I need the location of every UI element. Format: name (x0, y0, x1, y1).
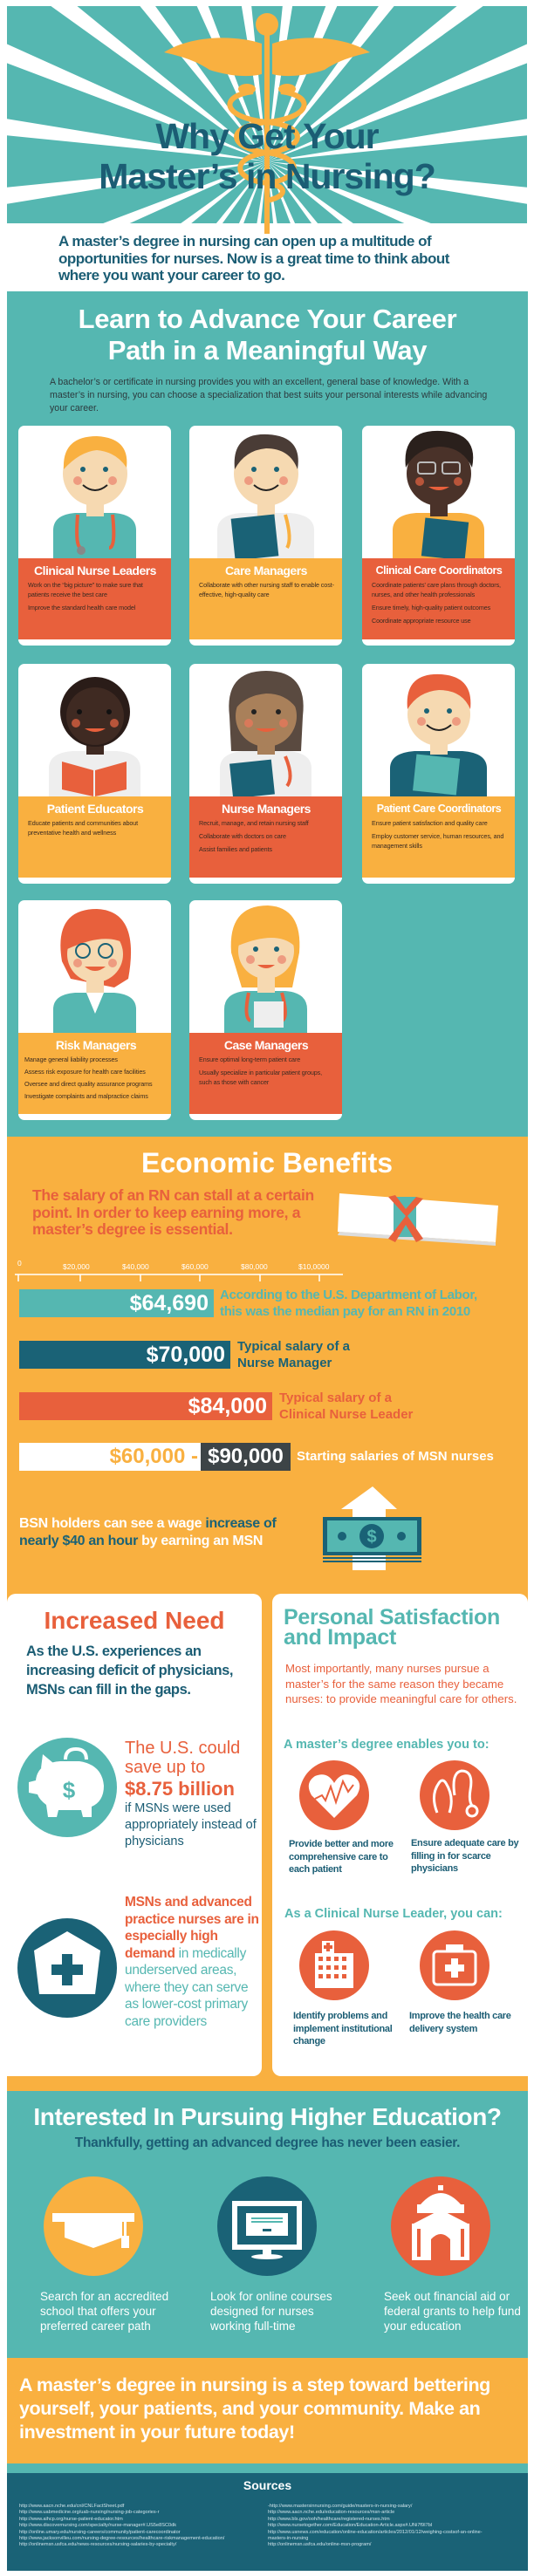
label: nurse manager: Typical salary of a (237, 1339, 350, 1354)
card text: Recruit, manage, and retain nursing staff (199, 819, 309, 827)
text: sources right: http://www.nursetogether.com/Education/Education-Article.aspx#.UNi7f9I7bI (268, 2523, 432, 2528)
caption: accredited school: Search for an accredited school that offers your preferred career path (40, 2290, 168, 2333)
card text: Coordinate patients’ care plans through doctors, nurses, and other health professionals (372, 581, 501, 598)
intro text: A master’s degree in nursing can open up a multitude of opportunities for nurses. Now is a great time to think about where you want your career to go. (58, 233, 449, 284)
label: RN median (220, 1288, 477, 1319)
text: sources left: http://www.jacksonvilleu.com/nursing-degree-resources/healthcare-riskmanagement-education/ (19, 2536, 224, 2541)
text: sources right: masters-in-nursing (268, 2536, 308, 2541)
label: clinical nurse leader: Clinical Nurse Leader (279, 1407, 413, 1422)
icon: heart (299, 1760, 369, 1830)
text: sources left: http://www.uabmedicine.org/uab-nursing/nursing-job-categories-r (19, 2510, 159, 2515)
card: nurse managers (189, 664, 342, 884)
chart: salary axis: 0 (17, 1259, 22, 1268)
text: sources left: http://onlinemsn.usfca.edu/news-resources/nursing-salaries-by-specialty/ (19, 2542, 176, 2547)
chart: salary axis: $40,000 (122, 1262, 149, 1271)
card text (362, 558, 515, 639)
icon: hospital building (299, 1930, 369, 2000)
callout: closing statement (7, 2358, 528, 2463)
icon: computer (217, 2176, 317, 2276)
card text: Usually specialize in particular patient groups, such as those with cancer (199, 1069, 322, 1086)
card: patient educators (18, 664, 171, 884)
chart: salary axis: $80,000 (241, 1262, 268, 1271)
card text: Investigate complaints and malpractice claims (24, 1092, 148, 1100)
card text: Oversee and direct quality assurance programs (24, 1080, 153, 1088)
chart: salary axis: $10,0000 (298, 1262, 330, 1271)
chart: salary axis: $20,000 (63, 1262, 90, 1271)
label: nurse manager (237, 1339, 351, 1370)
label: RN median: According to the U.S. Department of Labor, (220, 1288, 477, 1302)
heading: sources: Sources (243, 2478, 291, 2492)
heading: personal satisfaction: Personal Satisfaction and Impact (284, 1605, 500, 1650)
card text: Assess risk exposure for health care facilities (24, 1068, 146, 1076)
card: case managers (189, 900, 342, 1120)
text: deficit: As the U.S. experiences an increasing deficit of physicians, MSNs can fill in the gaps. (26, 1643, 233, 1698)
card text: Work on the “big picture” to make sure that patients receive the best care (28, 581, 143, 598)
card text: Ensure patient satisfaction and quality care (372, 819, 488, 827)
heading: learn to advance (79, 304, 457, 366)
bar: nurse manager: $70,000 (147, 1343, 225, 1367)
icon: hospital (17, 1918, 117, 2018)
bar: RN median (19, 1289, 214, 1317)
text: high demand: MSNs and advanced practice nurses are in especially high demand in medically underserved areas, where they can serve as lower-cost primary care providers (125, 1895, 259, 2029)
subheading: enables you to: A master’s degree enables you to: (284, 1738, 490, 1752)
card text: Care Managers (225, 564, 307, 577)
card text (189, 1033, 342, 1114)
icon: stethoscope (420, 1760, 490, 1830)
card text: Coordinate appropriate resource use (372, 617, 471, 625)
card text: Risk Managers (56, 1038, 136, 1052)
icon: university building (391, 2176, 490, 2276)
header sunburst (7, 6, 527, 223)
caption: improve delivery: Improve the health care delivery system (409, 2011, 511, 2034)
card text: Patient Care Coordinators (377, 803, 501, 815)
panel: increased need (7, 1594, 262, 2076)
intro paragraph: A bachelor’s or certificate in nursing provides you with an excellent, general base of knowledge. With a master’s in nursing, you can choose a specialization that best suits your personal interests while advancing your career. (50, 377, 487, 413)
text: sources right: http://www.usnews.com/education/online-education/articles/2012/01/12/weighing-costsof-an-online- (268, 2530, 483, 2535)
icon: caduceus (164, 13, 370, 234)
heading: economic benefits: Economic Benefits (141, 1147, 393, 1179)
subheading: Thankfully, getting an advanced degree has never been easier. (75, 2135, 460, 2150)
panel: career paths (7, 291, 528, 1137)
caption: financial aid: Seek out financial aid or federal grants to help fund your education (384, 2290, 521, 2333)
title: Master’s in Nursing? (99, 156, 435, 196)
card text: Case Managers (224, 1038, 308, 1052)
card text: Clinical Care Coordinators (376, 564, 502, 577)
heading: increased need: Increased Need (44, 1607, 225, 1634)
card text: Patient Educators (47, 802, 143, 816)
card: risk managers (18, 900, 171, 1120)
title (99, 116, 435, 196)
card text: Collaborate with other nursing staff to enable cost-effective, high-quality care (199, 581, 334, 598)
text: sources right: http://www.bls.gov/ooh/healthcare/registered-nurses.htm (268, 2517, 390, 2522)
title: Why Get Your (155, 116, 379, 156)
text: sources right: http://onlinemsn.usfca.edu/online-msn-program/ (268, 2542, 371, 2547)
icon: piggy bank: $ (63, 1777, 76, 1803)
panel: personal satisfaction (272, 1594, 528, 2076)
icon: money with arrow: $ (366, 1527, 377, 1547)
label: clinical nurse leader: Typical salary of a (279, 1390, 392, 1405)
text: save billions: if MSNs were used appropriately instead of physicians (125, 1801, 257, 1848)
text: meaningful care: Most importantly, many nurses pursue a master’s for the same reason they became nurses: to provide meaningful care for others. (285, 1662, 517, 1705)
card text: Ensure optimal long-term patient care (199, 1056, 300, 1063)
card text: Nurse Managers (222, 802, 311, 816)
callout: closing statement: A master’s degree in nursing is a step toward bettering yourself, your patients, and your community. Make an investment in your future today! (19, 2374, 490, 2443)
caption: better care: Provide better and more comprehensive care to each patient (289, 1839, 394, 1875)
card text (362, 796, 515, 878)
bar: clinical nurse leader: $84,000 (188, 1394, 267, 1418)
card text: Ensure timely, high-quality patient outcomes (372, 604, 490, 612)
panel: sources (7, 2473, 528, 2571)
heading: learn to advance: Learn to Advance Your Career (79, 304, 456, 334)
subheading: clinical nurse leader: As a Clinical Nurse Leader, you can: (284, 1907, 503, 1921)
card text (189, 558, 342, 639)
text: save billions: $8.75 billion (125, 1778, 235, 1800)
card text (18, 796, 171, 878)
text: sources left: http://online.umary.edu/nursing-careers/community/patient-carecoordinator (19, 2530, 181, 2535)
text: salary stall: The salary of an RN can stall at a certain point. In order to keep earning more, a master’s degree is essential. (32, 1186, 314, 1238)
text: sources left: http://www.discovernursing.com/specialty/nurse-manager#.US5e8SC0dk (19, 2523, 176, 2528)
text: sources right: http://www.aacn.nche.edu/education-resources/msn-article (268, 2510, 394, 2515)
label: nurse manager: Nurse Manager (237, 1356, 332, 1370)
text: BSN wage increase: BSN holders can see a wage increase of nearly $40 an hour by earning an MSN (19, 1516, 277, 1548)
icon: money with arrow (323, 1486, 421, 1570)
card text: Manage general liability processes (24, 1056, 118, 1063)
text: sources left (19, 2504, 225, 2547)
bar: RN median: $64,690 (130, 1291, 209, 1315)
bar: nurse manager (19, 1341, 230, 1369)
text: save billions (125, 1739, 257, 1848)
text: sources right (268, 2504, 483, 2547)
panel: economic benefits (7, 1137, 528, 2091)
chart: salary axis: $60,000 (181, 1262, 209, 1271)
chart: salary axis (15, 1259, 343, 1281)
card text: Educate patients and communities about preventative health and wellness (28, 819, 138, 837)
icon: piggy bank (17, 1738, 117, 1837)
bar: MSN range: $60,000 - (110, 1445, 198, 1468)
caption: adequate care: Ensure adequate care by filling in for scarce physicians (411, 1838, 518, 1874)
card text: Assist families and patients (199, 845, 272, 853)
card text (189, 796, 342, 878)
label: MSN range: Starting salaries of MSN nurses (297, 1449, 494, 1464)
card: care managers (189, 426, 342, 646)
heading: higher education: Interested In Pursuing Higher Education? (33, 2103, 502, 2130)
card text (18, 1033, 171, 1114)
caption: identify problems: Identify problems and implement institutional change (293, 2011, 393, 2046)
card text: Employ customer service, human resources, and management skills (372, 832, 503, 850)
icon: diploma (338, 1193, 498, 1246)
icon: first aid kit (420, 1930, 490, 2000)
bar: MSN range: $90,000 (208, 1445, 284, 1468)
card text: Improve the standard health care model (28, 604, 135, 612)
text: sources left: http://www.aacn.nche.edu/cnl/CNLFactSheet.pdf (19, 2504, 124, 2509)
card: clinical care coordinators (362, 426, 515, 646)
bar: clinical nurse leader (19, 1392, 272, 1420)
icon: graduation cap (44, 2176, 143, 2276)
label: RN median: this was the median pay for an RN in 2010 (220, 1304, 470, 1319)
text: sources left: http://www.aihcp.org/nurse-patient-educator.htm (19, 2517, 123, 2522)
label: clinical nurse leader (279, 1390, 414, 1422)
card text: Clinical Nurse Leaders (34, 564, 156, 577)
bar: MSN range (19, 1443, 291, 1471)
card text (18, 558, 171, 639)
caption: online courses: Look for online courses designed for nurses working full-time (210, 2290, 332, 2333)
text: save billions: The U.S. could save up to (125, 1739, 240, 1777)
card: patient care coordinators (362, 664, 515, 884)
card: clinical nurse leaders (18, 426, 171, 646)
panel: higher education (7, 2091, 528, 2358)
text: sources right: -http://www.mastersinnursing.com/guide/masters-in-nursing-salary/ (268, 2504, 412, 2509)
card text: Collaborate with doctors on care (199, 832, 286, 840)
heading: learn to advance: Path in a Meaningful Way (108, 335, 427, 366)
